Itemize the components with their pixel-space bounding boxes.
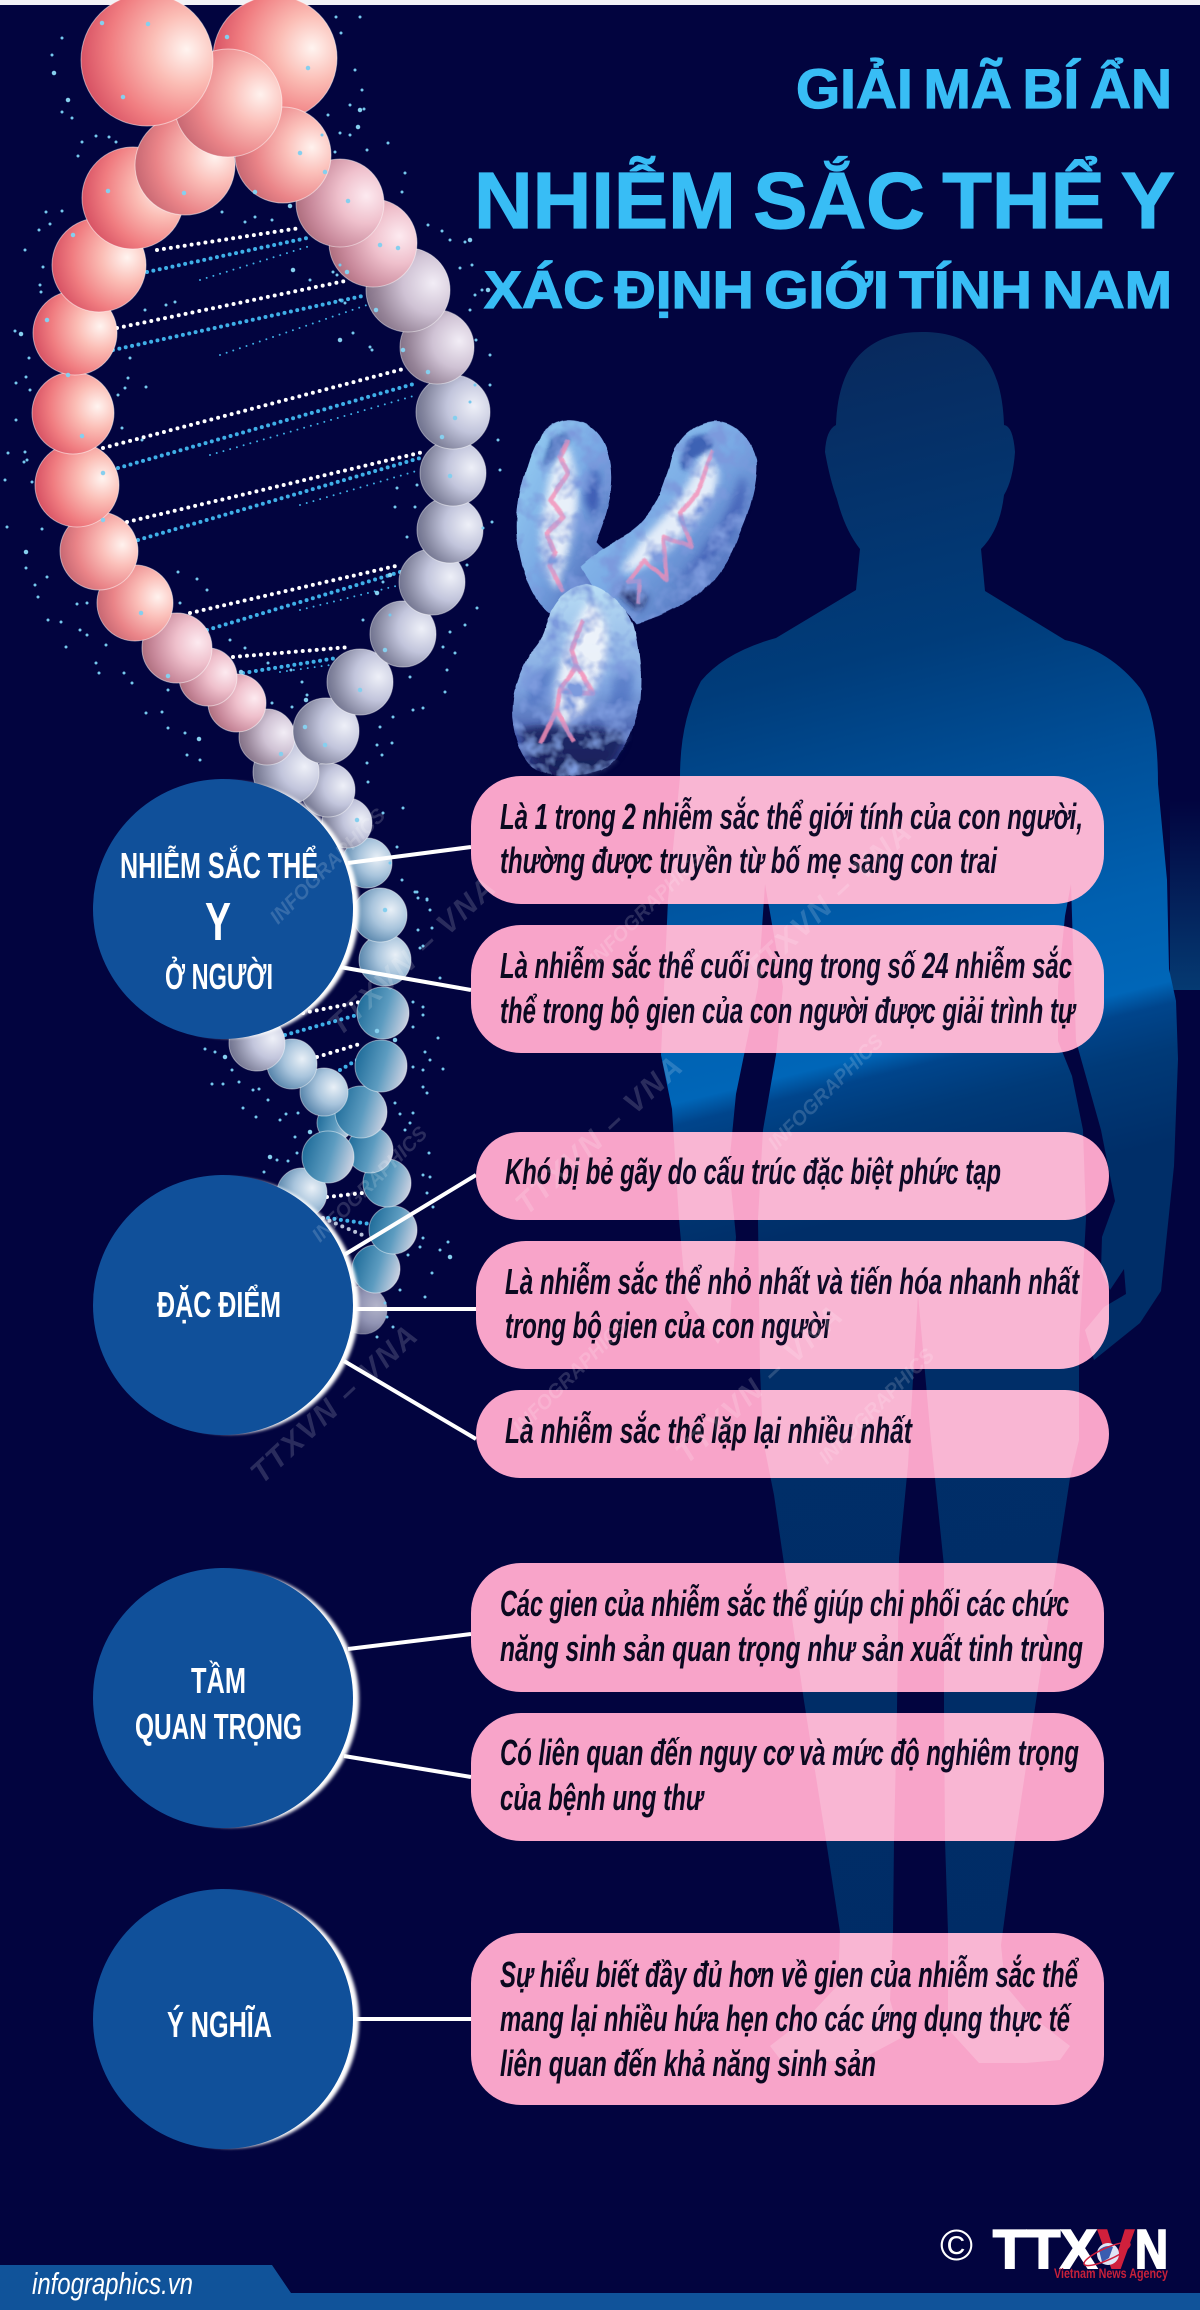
- logo TTXVN: N: [1135, 2218, 1168, 2280]
- circle: Ý nghĩa: Ý NGHĨA: [167, 2003, 272, 2045]
- logo TTXVN: V: [1098, 2218, 1134, 2280]
- chromosome right arm: [580, 422, 757, 623]
- pill: most repetitive: [476, 1390, 1109, 1478]
- circle: Đặc điểm: [93, 1175, 359, 1435]
- circle: Tầm quan trọng: [93, 1568, 359, 1828]
- pill: smallest and fastest evolving: [476, 1241, 1109, 1369]
- pill: sex chromosome fact: [471, 776, 1104, 904]
- watermarks: TTXVN – VNA: [669, 1298, 851, 1470]
- logo globe: [1082, 2238, 1132, 2270]
- watermarks: TTXVN – VNA: [244, 1318, 426, 1490]
- DNA beads lower section: [229, 159, 490, 1334]
- pill: cancer risk: [471, 1713, 1104, 1841]
- pill: significance: [471, 1933, 1104, 2105]
- DNA helix: [5, 0, 500, 1337]
- pill: hard to break: [476, 1132, 1109, 1220]
- DNA dust particles: [5, 17, 500, 1337]
- pill: last sequenced: [471, 925, 1104, 1053]
- DNA rungs: [103, 228, 423, 1237]
- pill: significance: liên quan đến khả năng sinh sản: [500, 2043, 876, 2084]
- circle: Ý nghĩa: [93, 1889, 359, 2149]
- watermarks: INFOGRAPHICS: [509, 1314, 633, 1439]
- pill: most repetitive: Là nhiễm sắc thể lặp lại nhiều nhất: [505, 1409, 913, 1451]
- logo TTXVN: Vietnam News Agency: [1054, 2265, 1168, 2281]
- watermarks: INFOGRAPHICS: [585, 846, 709, 971]
- watermarks: INFOGRAPHICS: [764, 1030, 888, 1155]
- watermarks: [244, 804, 939, 1490]
- logo TTXVN: TTX: [993, 2218, 1097, 2280]
- watermarks: TTXVN – VNA: [509, 1049, 691, 1221]
- title: XÁC ĐỊNH GIỚI TÍNH NAM: [484, 260, 1172, 320]
- DNA beads upper section: [32, 0, 337, 732]
- chromosome left arm: [516, 420, 612, 617]
- pill: reproductive functions: [471, 1563, 1104, 1692]
- pill: smallest and fastest evolving: trong bộ gien của con người: [505, 1305, 831, 1346]
- title: NHIỄM SẮC THỂ Y: [474, 156, 1175, 245]
- watermarks: INFOGRAPHICS: [815, 1344, 939, 1469]
- logo TTXVN: ©: [940, 2221, 973, 2270]
- footer band: [0, 2265, 1200, 2310]
- circle: Tầm quan trọng: QUAN TRỌNG: [135, 1706, 302, 1747]
- circle: Nhiễm sắc thể Y ở người: [93, 779, 359, 1039]
- circle: Nhiễm sắc thể Y ở người: NHIỄM SẮC THỂ: [120, 844, 318, 886]
- logo TTXVN: [940, 2218, 1168, 2281]
- male body silhouette: [661, 332, 1200, 2063]
- watermarks: TTXVN – VNA: [738, 815, 920, 987]
- circle: Tầm quan trọng: TẦM: [191, 1660, 246, 1701]
- chromosome lower arm: [512, 583, 641, 776]
- chromosome Y illustration: [512, 420, 757, 776]
- watermarks: INFOGRAPHICS: [308, 1122, 432, 1247]
- circle: Nhiễm sắc thể Y ở người: Y: [205, 892, 231, 952]
- watermarks: TTXVN – VNA: [322, 870, 504, 1042]
- watermarks: INFOGRAPHICS: [266, 804, 390, 929]
- title: [474, 57, 1175, 320]
- circle: Đặc điểm: ĐẶC ĐIỂM: [157, 1283, 281, 1325]
- footer site name: infographics.vn: [32, 2266, 193, 2301]
- title: GIẢI MÃ BÍ ẨN: [796, 57, 1172, 120]
- connector lines: [340, 847, 476, 2019]
- circle: Nhiễm sắc thể Y ở người: Ở NGƯỜI: [165, 955, 273, 997]
- pill: cancer risk: của bệnh ung thư: [500, 1777, 705, 1818]
